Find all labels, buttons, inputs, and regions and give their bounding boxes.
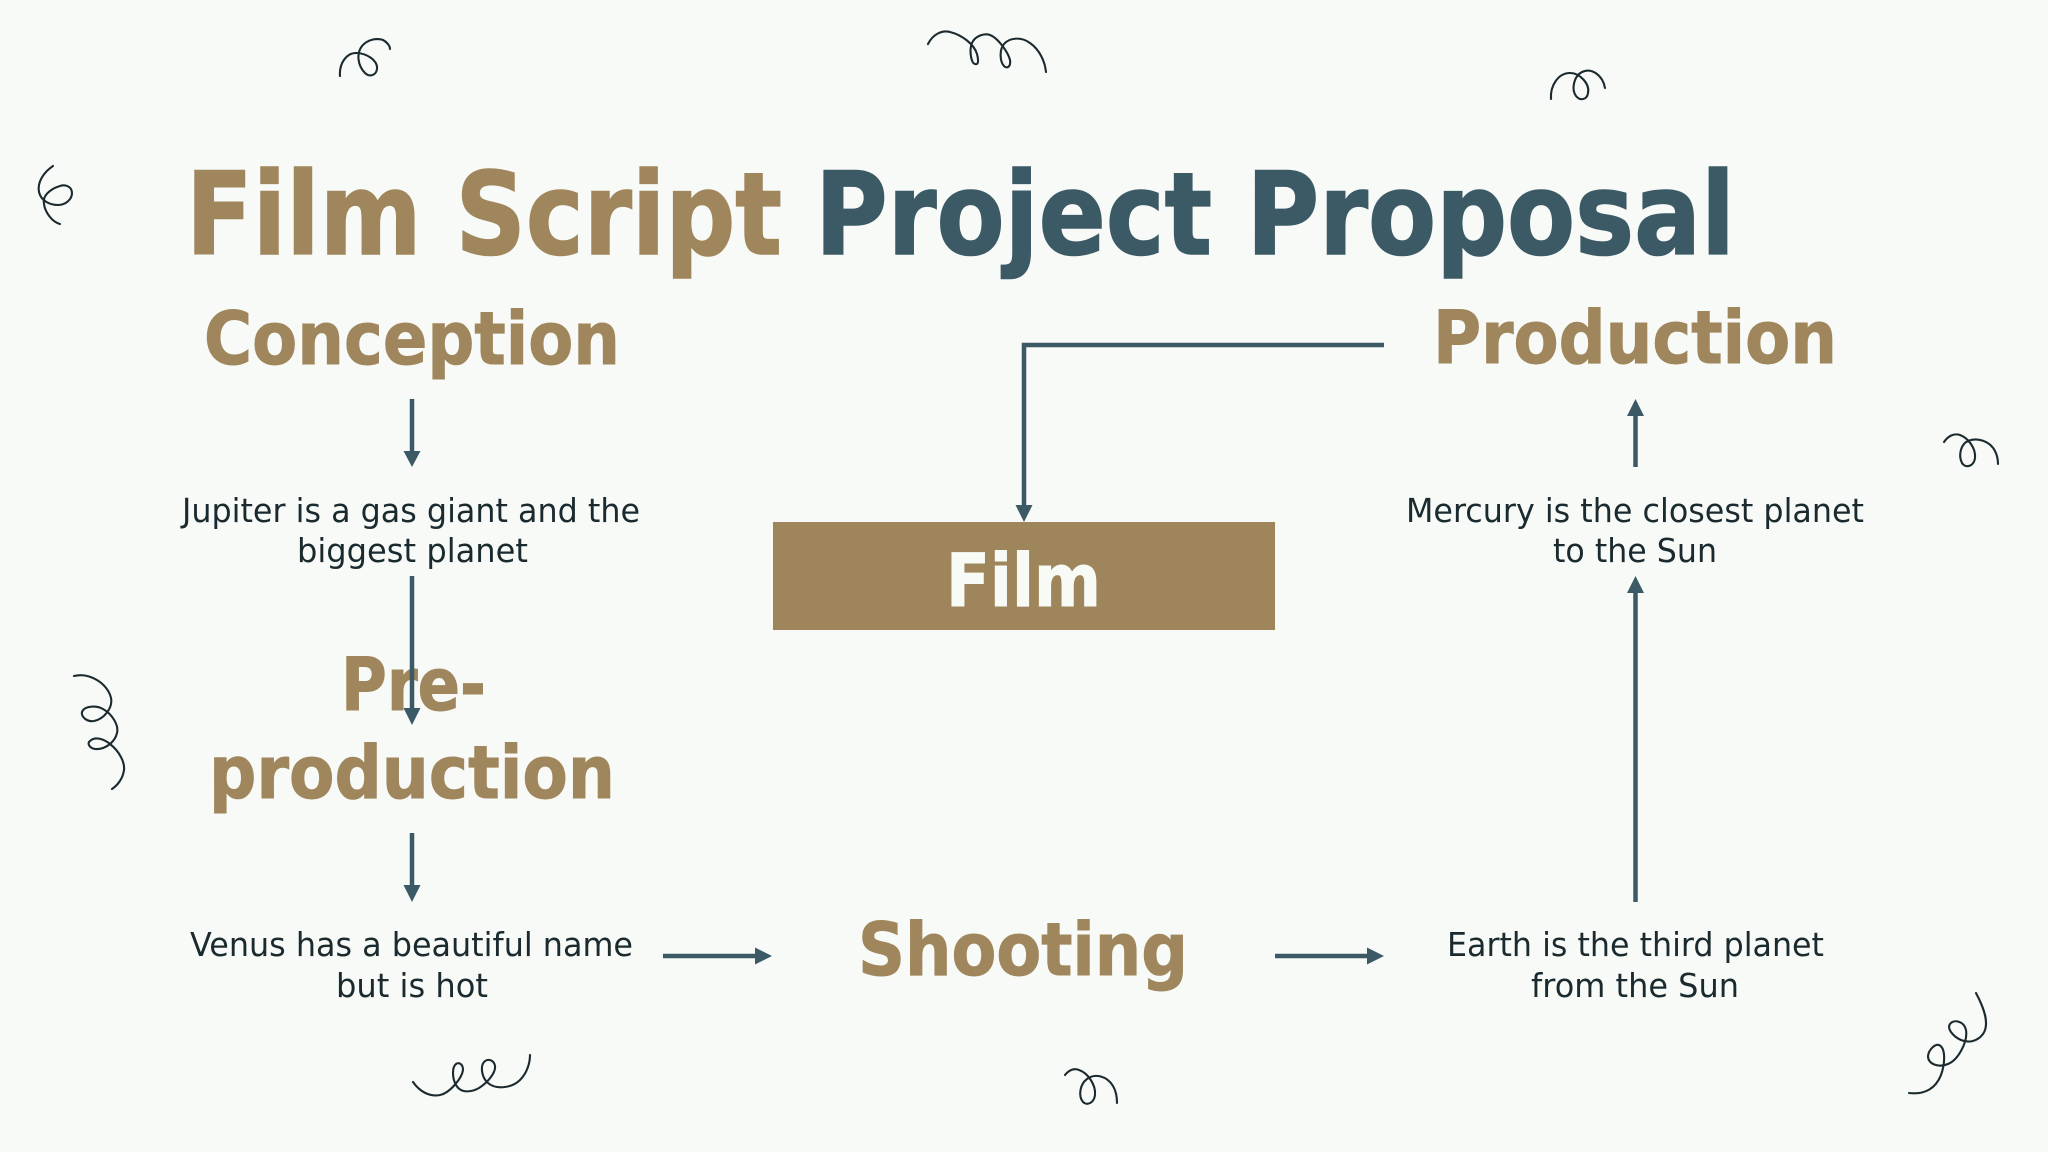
squiggle: top centre (928, 32, 1046, 72)
text: Mercury: Mercury is the closest planet (1406, 491, 1864, 530)
box: Film (773, 522, 1275, 630)
text: Venus: but is hot (336, 966, 488, 1005)
arrow: Jupiter text to Pre-production (404, 576, 420, 725)
heading: Shooting: Shooting (858, 908, 1188, 993)
squiggle: bottom right (1909, 993, 1986, 1093)
squiggle: top left (340, 39, 390, 76)
text: Earth: from the Sun (1531, 966, 1739, 1005)
arrow: Earth text to Mercury text (1627, 576, 1644, 902)
text: Jupiter: biggest planet (297, 531, 528, 570)
heading: Conception: Conception (204, 297, 620, 382)
title: Film Script (186, 148, 782, 281)
title: Project Proposal (815, 148, 1735, 281)
arrow: Pre-production to Venus text (404, 833, 420, 902)
arrow: Production to Film (1016, 345, 1384, 522)
heading: Production: Production (1433, 296, 1837, 381)
heading: Pre-production: production (209, 731, 615, 816)
arrow: Shooting to Earth text (1275, 948, 1384, 964)
squiggle: upper left edge (39, 166, 72, 224)
arrow: conception to Jupiter text (404, 399, 420, 467)
text: Mercury (1406, 491, 1864, 570)
box: Film: Film (946, 539, 1101, 624)
arrow: Mercury text to Production (1627, 399, 1644, 467)
squiggle: bottom left (413, 1055, 530, 1095)
heading: Pre-production (209, 643, 615, 816)
squiggle: lower left edge (74, 675, 124, 789)
title (186, 148, 1735, 281)
squiggle: top right (1551, 71, 1605, 99)
heading: Pre-production: Pre- (341, 643, 486, 728)
text: Jupiter (180, 491, 640, 570)
squiggle: bottom centre (1065, 1069, 1117, 1104)
text: Jupiter: Jupiter is a gas giant and the (180, 491, 640, 530)
squiggle: right edge (1944, 434, 1998, 466)
text: Venus: Venus has a beautiful name (190, 925, 633, 964)
text: Earth: Earth is the third planet (1447, 925, 1824, 964)
text: Earth (1447, 925, 1824, 1005)
text: Venus (190, 925, 633, 1005)
arrow: Venus text to Shooting (663, 948, 772, 964)
text: Mercury: to the Sun (1553, 531, 1717, 570)
